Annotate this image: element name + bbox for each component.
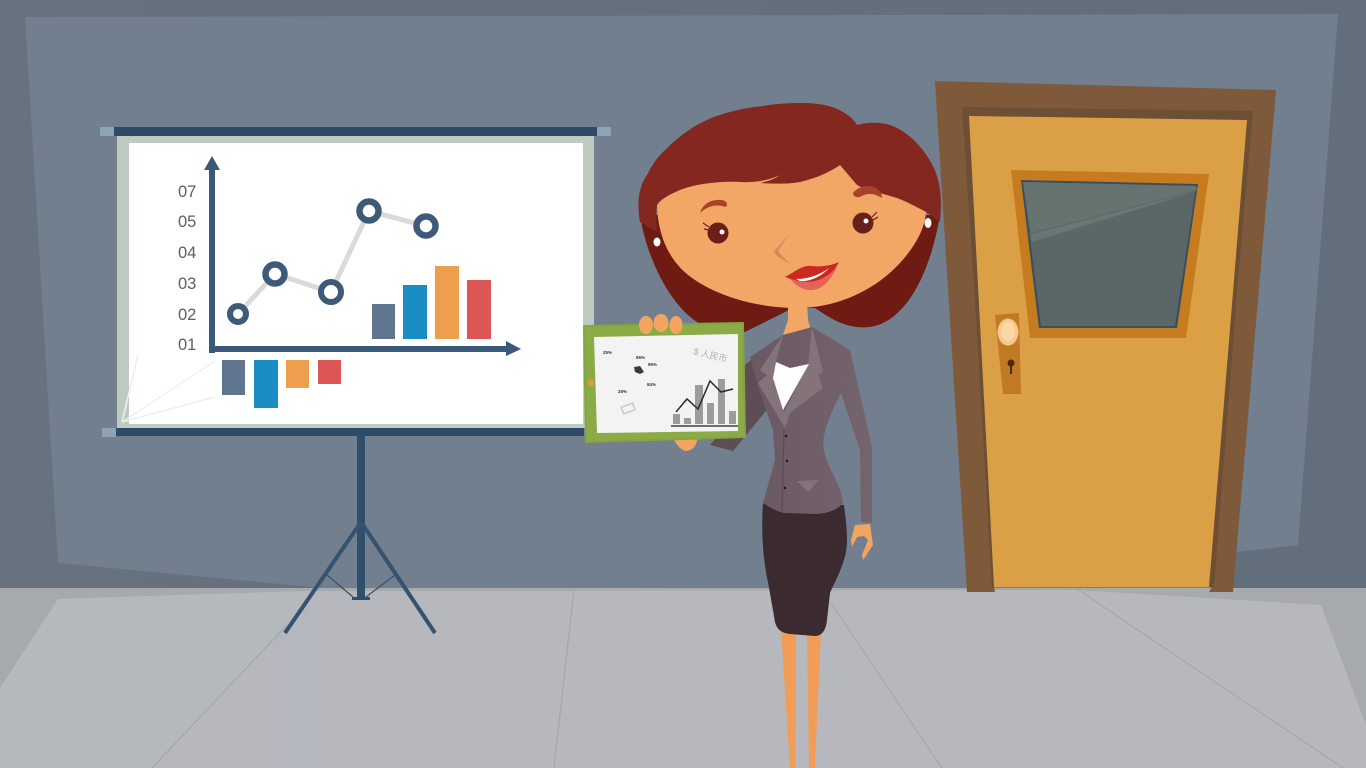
y axis labels: 07 [178, 183, 196, 201]
tablet [584, 323, 745, 442]
tablet percent labels: 25% [618, 389, 627, 394]
thumb [673, 437, 697, 451]
eyebrows [700, 186, 882, 213]
door leaf [969, 116, 1247, 587]
chart on screen [178, 156, 521, 408]
face [657, 150, 926, 308]
screen surface [129, 143, 583, 424]
white blouse [773, 362, 809, 410]
bars below axis [222, 360, 341, 408]
lapels [758, 327, 823, 428]
tablet percent labels [603, 350, 657, 394]
tablet percent labels: 84% [647, 382, 656, 387]
tablet percent labels: 65% [636, 355, 645, 360]
y axis labels: 05 [178, 213, 196, 231]
jacket pocket [797, 480, 819, 492]
y axis labels: 02 [178, 306, 196, 324]
tablet icon: money [621, 403, 635, 414]
y axis labels [178, 183, 196, 354]
screen frame [117, 136, 594, 428]
top roller bar [100, 127, 611, 136]
axes [204, 156, 521, 356]
y axis labels: 04 [178, 244, 196, 262]
line series [230, 202, 436, 322]
tablet screen [594, 334, 738, 433]
room wall [0, 0, 1366, 590]
door [935, 81, 1276, 592]
hanging hand [851, 524, 873, 560]
sleeve behind tablet [710, 340, 775, 451]
mouth [785, 262, 839, 290]
right eye [852, 212, 878, 234]
door frame shadow [962, 107, 1253, 587]
tablet button [588, 380, 594, 386]
y axis labels: 01 [178, 336, 196, 354]
screen light rays [122, 355, 215, 422]
jacket front seam [782, 430, 784, 512]
nose [774, 235, 789, 263]
bottom bar [102, 428, 584, 437]
jacket buttons [784, 435, 788, 489]
jacket [750, 327, 872, 523]
tablet body [584, 323, 745, 442]
left eye [703, 222, 728, 244]
door frame [935, 81, 1276, 592]
front hair [638, 103, 941, 232]
legs [781, 630, 821, 768]
door handle [995, 313, 1021, 394]
projection screen [100, 127, 611, 437]
back hair [640, 215, 940, 334]
fingers [639, 314, 682, 334]
earrings [654, 218, 932, 246]
bars above axis [372, 266, 491, 339]
tripod stand [285, 436, 435, 633]
tablet percent labels: 95% [648, 362, 657, 367]
presenter woman [638, 103, 941, 768]
tablet chart [671, 379, 738, 426]
neck [772, 300, 816, 372]
y axis labels: 03 [178, 275, 196, 293]
skirt [762, 503, 847, 636]
floor [0, 588, 1366, 768]
tablet icon: dark shape [634, 366, 644, 374]
tablet currency label: $ 人民币 [693, 346, 728, 364]
tablet percent labels: 25% [603, 350, 612, 355]
door window [1011, 170, 1209, 338]
